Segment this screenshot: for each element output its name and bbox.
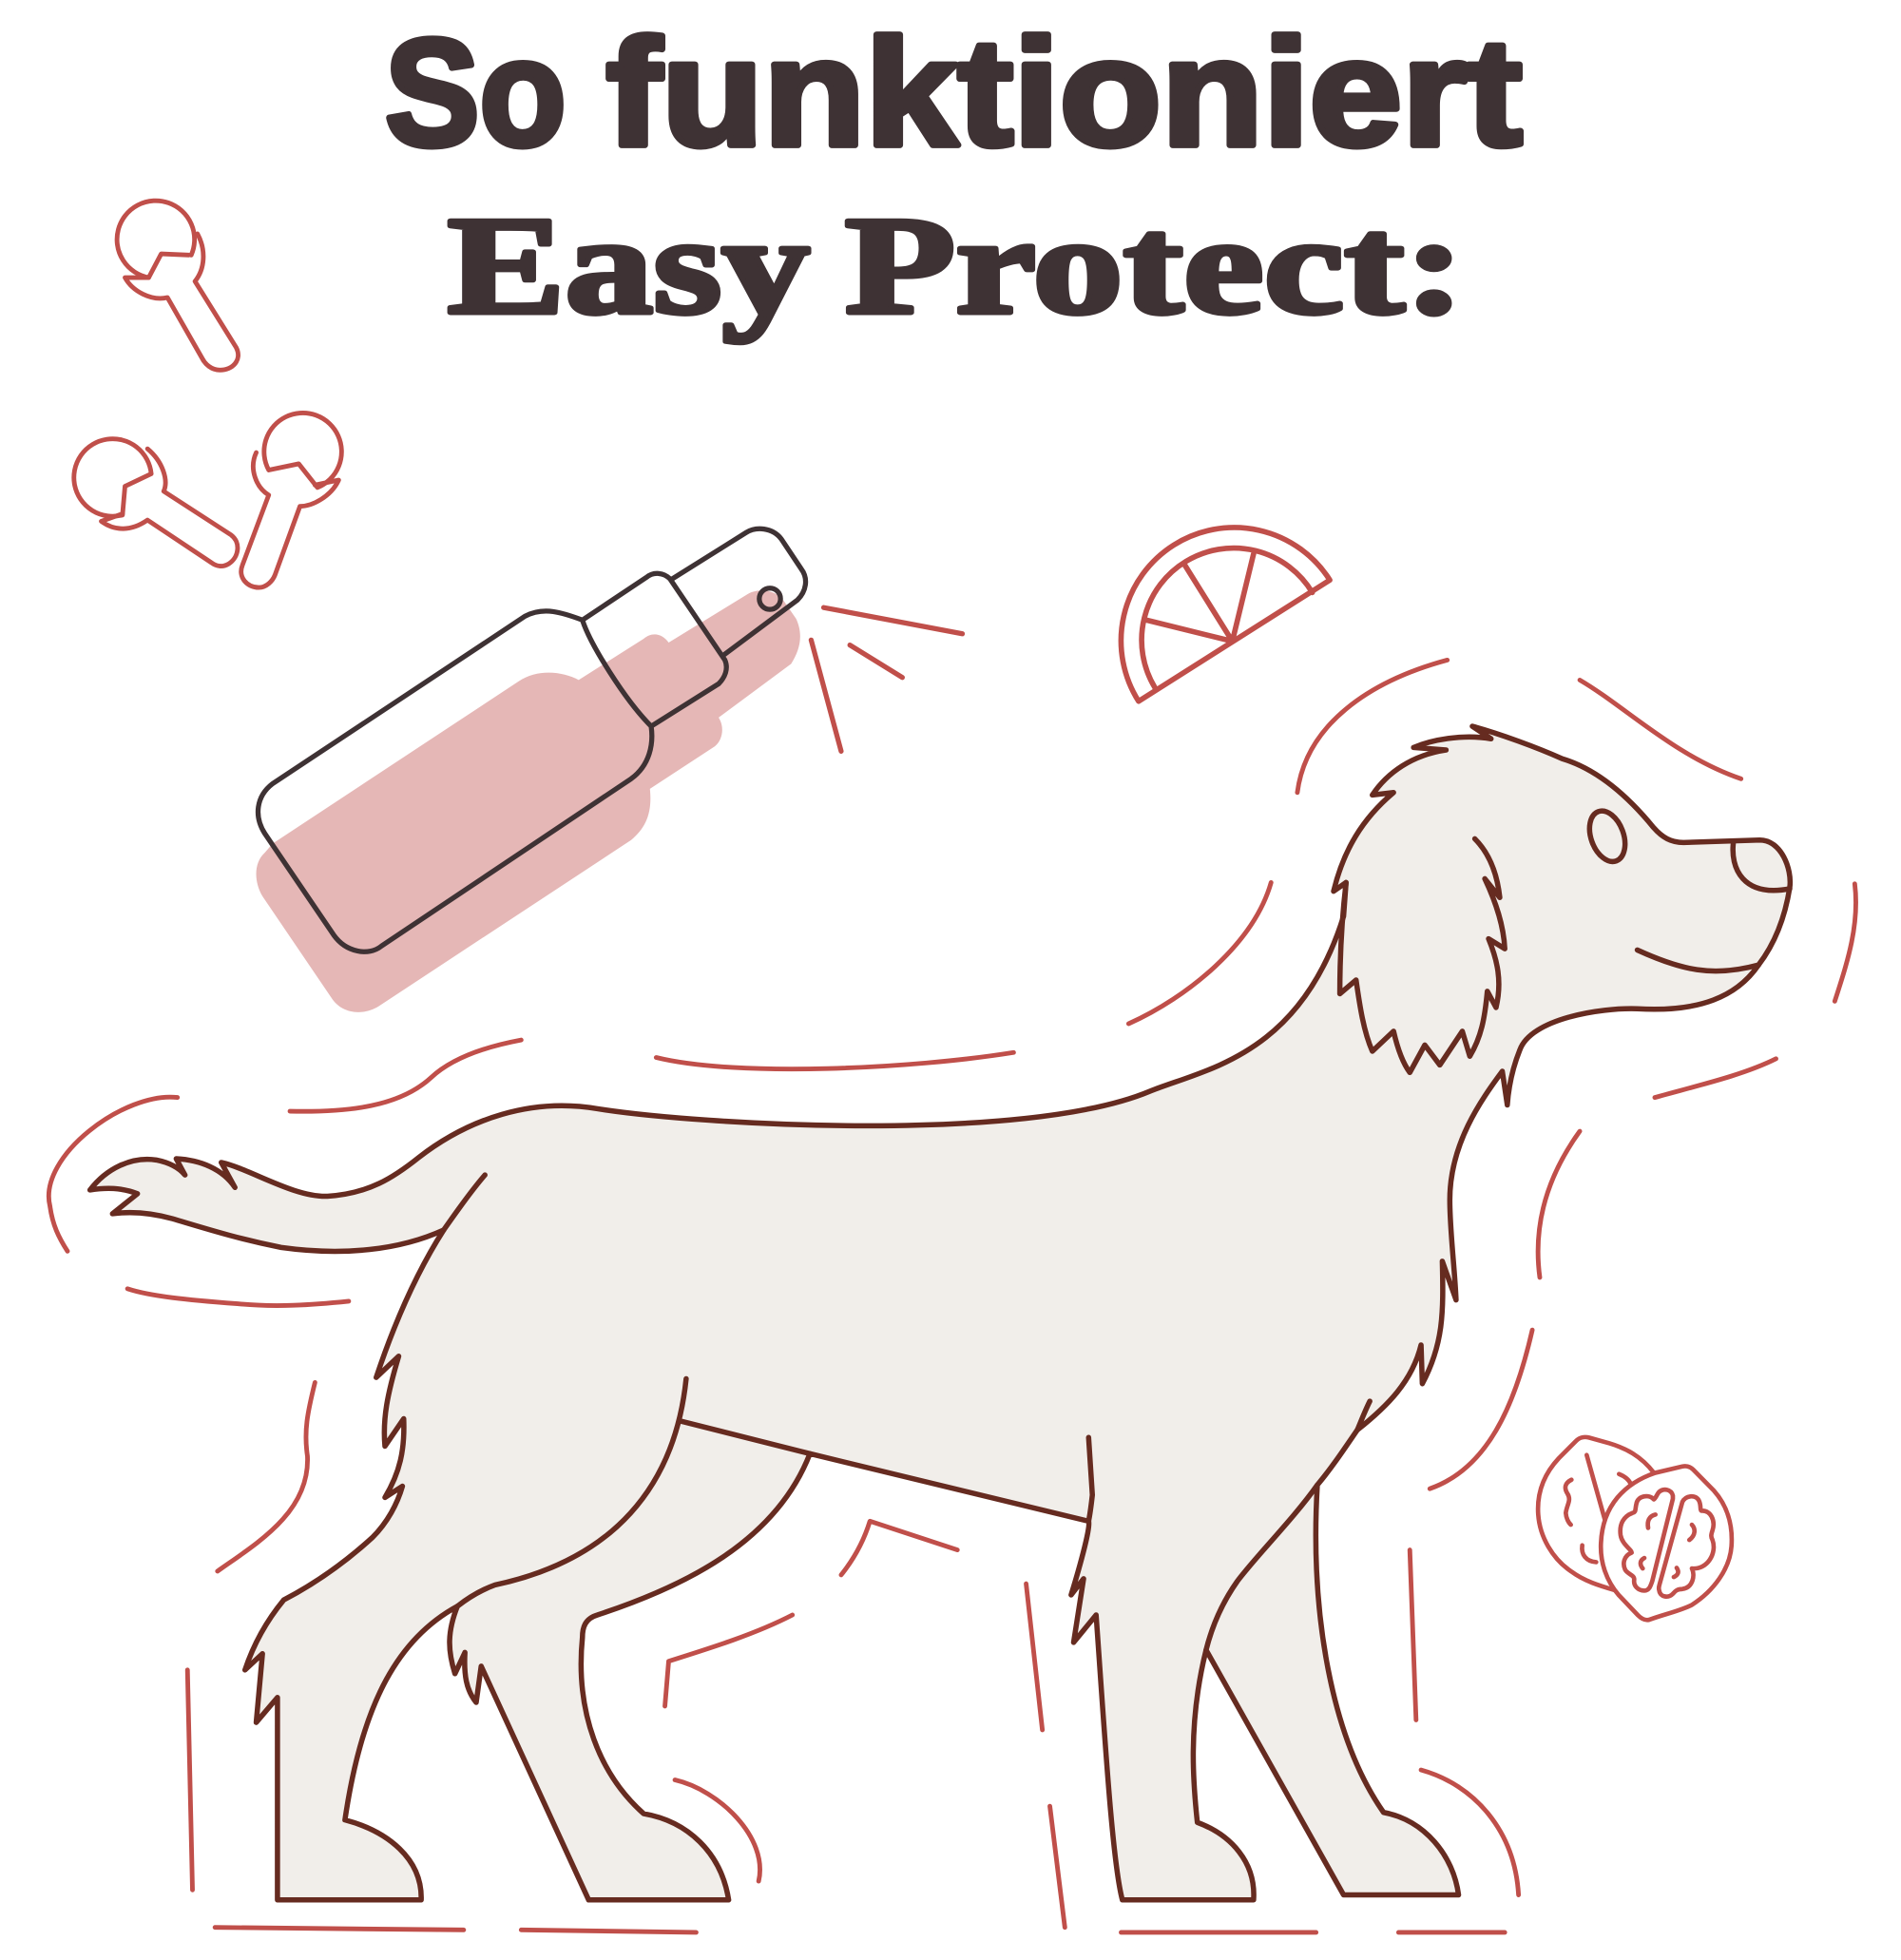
- icon: clove left: [74, 439, 238, 567]
- spray lines: [811, 607, 962, 751]
- dog silhouette: [90, 726, 1790, 1900]
- title line 1: So: [385, 8, 566, 178]
- title line 2: Easy: [448, 188, 810, 343]
- dog mouth: [1638, 950, 1758, 971]
- bottle liquid shadow: [257, 590, 800, 1012]
- icon: spray bottle: [257, 528, 806, 1012]
- icon: orange slice: [1121, 528, 1330, 701]
- icon: walnut: [1538, 1437, 1732, 1620]
- icon: clove top: [117, 201, 239, 370]
- bottle outline: [259, 528, 806, 951]
- title line 2: [448, 188, 1465, 343]
- dog nose: [1733, 841, 1790, 891]
- illustration: dog: [90, 726, 1790, 1900]
- title line 2: Protect:: [845, 188, 1465, 343]
- dog eye: [1583, 806, 1632, 867]
- icon: clove right: [241, 413, 341, 587]
- dog ear: [1340, 838, 1505, 1072]
- title line 1: funktioniert: [606, 8, 1523, 178]
- dog inner lines: [444, 1175, 1370, 1650]
- motion lines: [48, 660, 1856, 1932]
